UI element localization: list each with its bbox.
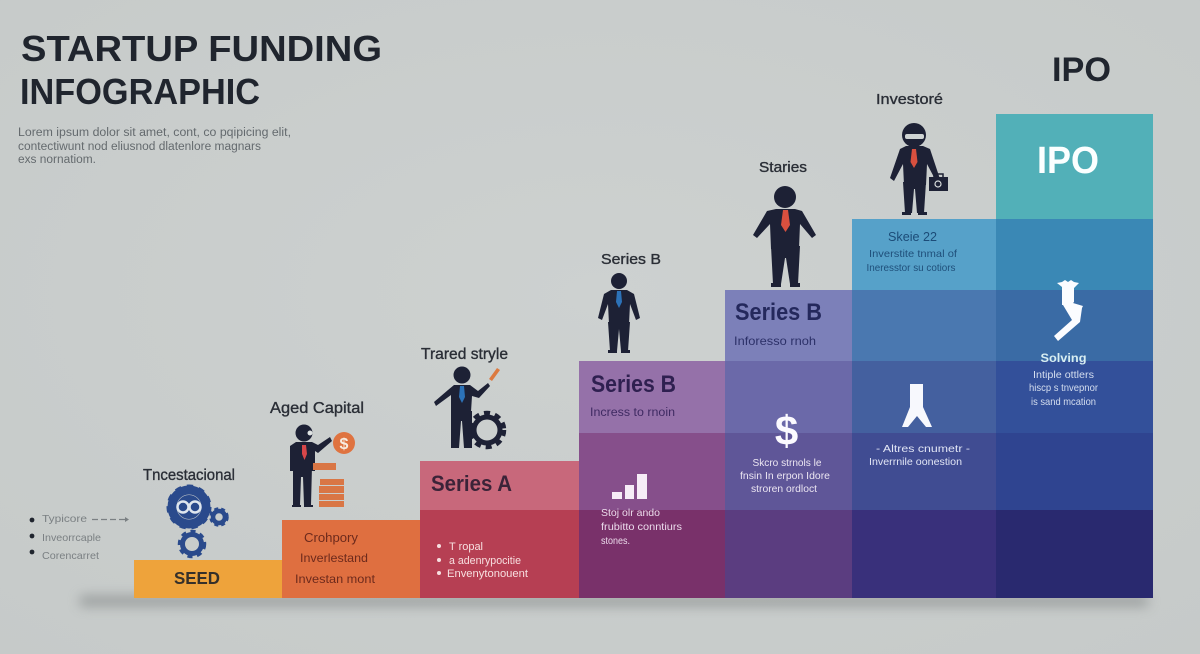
panel: second series B step: stroren ordloct <box>751 483 817 495</box>
intro text <box>18 127 291 166</box>
icon: investor with coins: $ <box>340 436 349 453</box>
panel: IPO step: is sand mcation <box>1031 396 1096 408</box>
panel: capital step: Investan mont <box>295 572 376 586</box>
panel: series A step: Series A <box>431 471 512 496</box>
legend <box>30 513 129 562</box>
panel: series A step: T ropal <box>449 541 483 553</box>
heading: series A label: Trared stryle <box>421 346 508 363</box>
panel: investor step: Inverstite tnmal of <box>869 248 957 260</box>
panel: second series B step: fnsin In erpon Idore <box>740 470 830 482</box>
icon: standing investor, blue tie <box>598 273 640 353</box>
heading: investor label: Investoré <box>876 92 943 108</box>
panel: seed step <box>134 560 282 598</box>
title: INFOGRAPHIC <box>20 71 260 112</box>
panel: series A step: Envenytonouent <box>447 568 528 580</box>
panel: IPO step: Intiple ottlers <box>1033 369 1094 381</box>
panel: capital step: Crohpory <box>304 530 359 545</box>
panel: series B step: Stoj olr ando <box>601 507 660 519</box>
heading: capital label: Aged Capital <box>270 400 364 417</box>
panel: investor step: Ineresstor su cotiors <box>866 262 956 274</box>
intro text: Lorem ipsum dolor sit amet, cont, co pqipicing elit, <box>18 127 291 139</box>
intro text: contectiwunt nod eliusnod dlatenlore magnars <box>18 141 261 153</box>
panel: series B step: Series B <box>591 371 676 398</box>
staircase base shadow <box>80 596 1148 606</box>
legend: Corencarret <box>42 550 99 562</box>
panel: second series B step <box>725 290 852 598</box>
heading: seed label: Tncestacional <box>143 467 235 484</box>
panel: capital step: Inverlestand <box>300 551 368 565</box>
heading: IPO label: IPO <box>1052 51 1111 89</box>
panel: series B step: stones. <box>601 535 630 547</box>
panel: seed step: SEED <box>174 568 220 588</box>
heading: series B label: Series B <box>601 252 661 268</box>
panel: investor step: Skeie 22 <box>888 229 937 244</box>
legend: Typicore <box>42 513 87 525</box>
panel: second series B step: Series B <box>735 299 822 326</box>
panel: second series B step: Inforesso rnoh <box>734 334 816 348</box>
panel: series B step: frubitto conntiurs <box>601 521 682 533</box>
panel: IPO step: hiscp s tnvepnor <box>1029 382 1098 394</box>
panel: series B step <box>579 361 725 598</box>
panel: series A step <box>420 461 579 598</box>
icon: investor with coins <box>290 424 355 507</box>
panel: IPO step <box>996 114 1153 598</box>
panel: investor step: Inverrnile oonestion <box>869 456 962 468</box>
icon: investor with briefcase <box>890 123 948 215</box>
panel: investor step: - Altres cnumetr - <box>876 443 971 455</box>
intro text: exs nornatiom. <box>18 154 96 166</box>
panel: IPO step: Solving <box>1040 351 1086 365</box>
icon: standing investor, red tie <box>753 186 816 287</box>
icon: gears <box>169 487 228 556</box>
heading: stage label: Staries <box>759 160 807 176</box>
panel: series A step: a adenrypocitie <box>449 555 521 567</box>
panel: second series B step: $ <box>775 407 798 454</box>
panel: second series B step: Skcro strnols le <box>752 457 822 469</box>
panel: capital step <box>282 520 420 598</box>
panel: series B step: Incress to rnoin <box>590 407 675 419</box>
title: STARTUP FUNDING <box>21 28 382 69</box>
panel: investor step <box>852 219 996 598</box>
panel: IPO step: IPO <box>1037 140 1099 182</box>
icon: presenter with gear <box>434 366 504 448</box>
title <box>20 28 382 112</box>
legend: Inveorrcaple <box>42 532 101 544</box>
